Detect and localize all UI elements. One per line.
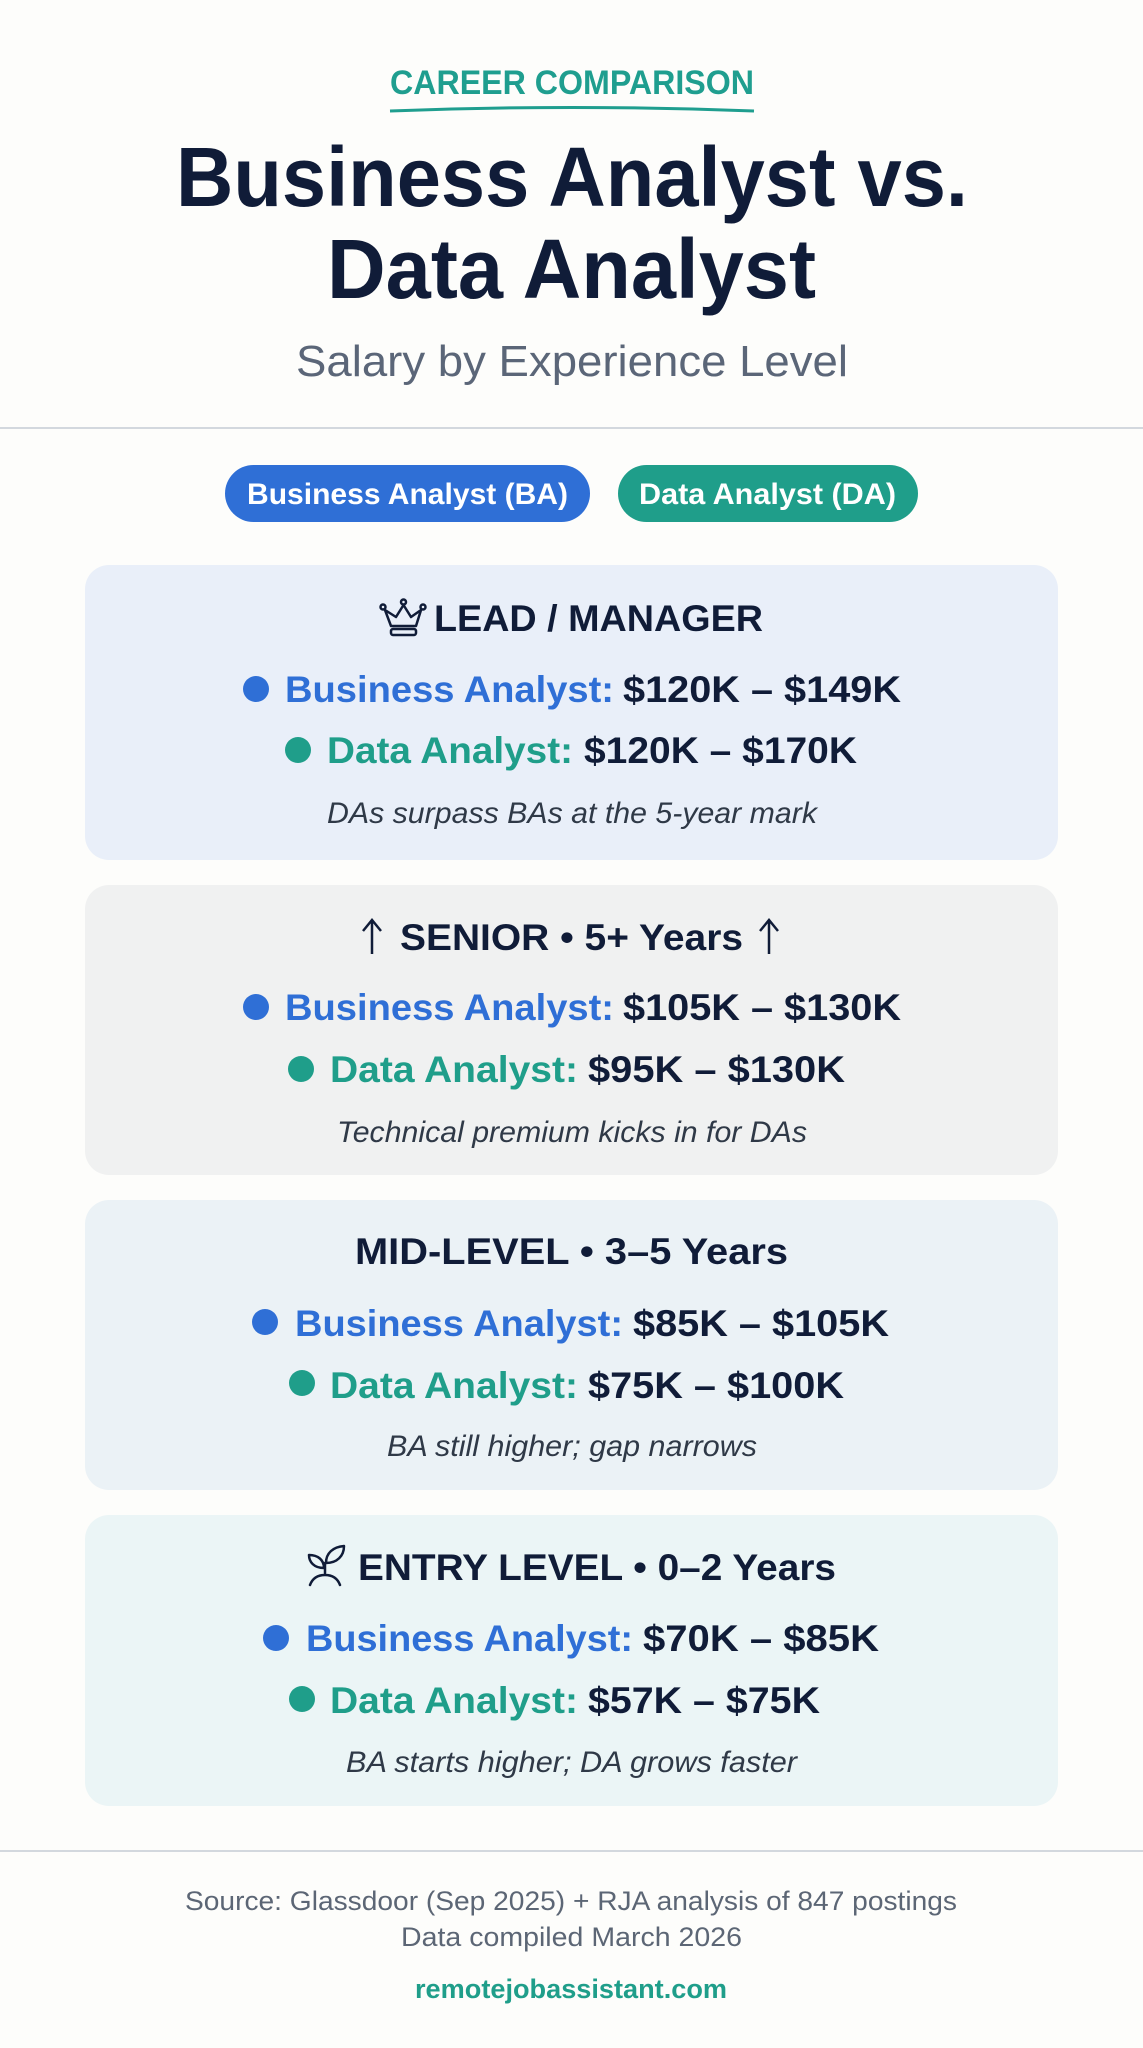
row: business analyst: Business Analyst: [306, 1618, 633, 1659]
heading: SENIOR • 5+ Years [400, 917, 743, 958]
row: data analyst: Data Analyst: [330, 1680, 578, 1721]
row: data analyst [289, 1680, 820, 1721]
footer: website: remotejobassistant.com [415, 1974, 727, 2004]
icon: sprout [309, 1546, 344, 1585]
row: business analyst [263, 1618, 879, 1659]
row: business analyst [243, 669, 901, 710]
panel: mid-level [85, 1200, 1058, 1490]
panel: lead / manager [85, 565, 1058, 860]
row: business analyst: $70K – $85K [643, 1618, 879, 1659]
icon: up arrow left [363, 920, 381, 954]
row: data analyst [285, 730, 857, 771]
row: data analyst: Data Analyst: [327, 730, 573, 771]
row: data analyst: $75K – $100K [588, 1365, 844, 1406]
footer: source: Source: Glassdoor (Sep 2025) + RJA analysis of 847 postings [185, 1886, 957, 1916]
heading: LEAD / MANAGER [434, 598, 763, 639]
row: data analyst [288, 1049, 845, 1090]
heading: MID-LEVEL • 3–5 Years [355, 1231, 788, 1272]
row: business analyst [243, 987, 901, 1028]
row: business analyst: Business Analyst: [285, 987, 614, 1028]
row: data analyst [289, 1365, 844, 1406]
icon: crown [380, 600, 426, 635]
row: data analyst: Data Analyst: [330, 1365, 578, 1406]
subtitle: Salary by Experience Level [296, 337, 848, 386]
row: business analyst: Business Analyst: [295, 1303, 623, 1344]
legend pill: business analyst: Business Analyst (BA) [247, 478, 568, 511]
legend pill: business analyst [225, 465, 590, 522]
legend [225, 465, 918, 522]
legend pill: data analyst [618, 465, 918, 522]
note: DAs surpass BAs at the 5-year mark [327, 797, 819, 830]
eyebrow: career comparison: CAREER COMPARISON [390, 64, 754, 102]
footer: source [185, 1886, 957, 1952]
note: Technical premium kicks in for DAs [337, 1116, 807, 1149]
note: BA starts higher; DA grows faster [346, 1746, 798, 1779]
note: BA still higher; gap narrows [387, 1430, 757, 1463]
icon: up arrow right [760, 920, 778, 954]
panel: senior [85, 885, 1058, 1175]
row: business analyst: $120K – $149K [623, 669, 901, 710]
row: data analyst: $57K – $75K [588, 1680, 820, 1721]
row: business analyst: Business Analyst: [285, 669, 614, 710]
legend pill: data analyst: Data Analyst (DA) [639, 478, 896, 511]
row: data analyst: $95K – $130K [588, 1049, 845, 1090]
panel: entry level [85, 1515, 1058, 1806]
footer: source: Data compiled March 2026 [401, 1922, 742, 1952]
title: Data Analyst [327, 222, 816, 316]
row: business analyst [252, 1303, 889, 1344]
title [176, 130, 968, 316]
row: business analyst: $105K – $130K [623, 987, 901, 1028]
row: data analyst: $120K – $170K [584, 730, 857, 771]
title: Business Analyst vs. [176, 130, 968, 224]
row: business analyst: $85K – $105K [633, 1303, 889, 1344]
row: data analyst: Data Analyst: [330, 1049, 578, 1090]
heading: ENTRY LEVEL • 0–2 Years [358, 1547, 836, 1588]
